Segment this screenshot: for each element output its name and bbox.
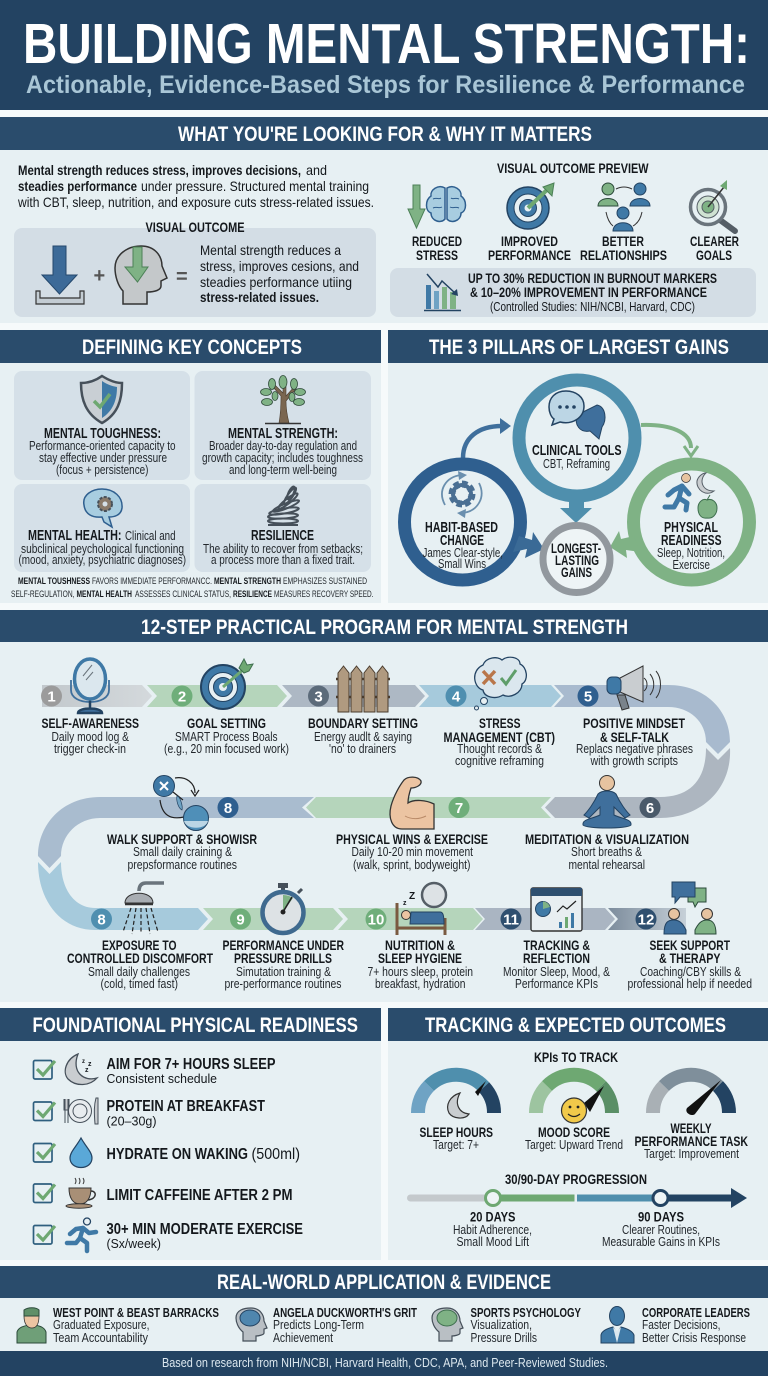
- pillar: physical readiness: Sleep, Notrition,: [657, 545, 725, 560]
- 30/90-day progression: 90 DAYS: [638, 1208, 684, 1224]
- icon: chat and brain: [549, 391, 605, 439]
- step 4: stress management: 4: [452, 688, 461, 706]
- comparison note: EMPHASIZES SUSTAINED: [283, 576, 367, 587]
- 30/90-day progression: [407, 1171, 747, 1249]
- card: mental toughness: Performance-oriented capacity to: [29, 438, 176, 453]
- step 11: tracking: Performance KPIs: [515, 976, 598, 991]
- pillar: clinical tools: CLINICAL TOOLS: [532, 442, 622, 459]
- card: mental toughness: [14, 371, 190, 480]
- step 8: exposure to discomfort: Small daily challenges: [88, 964, 190, 979]
- comparison note: FAVORS IMMEDIATE PERFORMANCC.: [92, 576, 212, 587]
- step 10: nutrition and sleep: NUTRITION &: [385, 937, 455, 953]
- checklist: hydrate: (500ml): [252, 1146, 300, 1163]
- visual outcome preview: [390, 161, 756, 317]
- icon: water drop: [70, 1138, 92, 1168]
- icon: smiley: [562, 1086, 604, 1123]
- step 11: tracking: Monitor Sleep, Mood, &: [503, 964, 610, 979]
- heading: DEFINING KEY CONCEPTS: [82, 336, 302, 359]
- step 1: self-awareness: trigger check-in: [54, 741, 126, 756]
- card: mental strength: Broader day-to-day regulation and: [209, 438, 357, 453]
- panel: foundational physical readiness: [0, 1008, 381, 1260]
- icon: clearer goals: [690, 180, 735, 231]
- step 11: tracking: TRACKING &: [524, 937, 590, 953]
- icon: bed and clock: z: [403, 900, 407, 907]
- checklist: hydrate: [34, 1138, 300, 1168]
- checklist: caffeine: [34, 1178, 292, 1208]
- icon: shield: [81, 376, 122, 423]
- card: mental strength: growth capacity; includes toughness: [202, 450, 363, 465]
- step 12: seek support: & THERAPY: [659, 950, 721, 966]
- arrow: physical to center: [610, 531, 640, 558]
- intro paragraph: with CBT, sleep, nutrition, and exposure cuts stress-related issues.: [17, 194, 374, 210]
- step 6: meditation: [525, 776, 689, 872]
- step 8: exposure to discomfort: CONTROLLED DISCOMFORT: [67, 950, 213, 966]
- pillar: habit-based change: [404, 464, 520, 580]
- step 1: self-awareness: SELF-AWARENESS: [42, 715, 139, 731]
- pillar: physical readiness: PHYSICAL: [664, 519, 718, 536]
- comparison note: RESILIENCE: [233, 589, 272, 600]
- icon: head with blue brain: [236, 1308, 267, 1341]
- icon: business person: [601, 1306, 634, 1343]
- example: grit: [236, 1306, 417, 1345]
- checklist: sleep: AIM FOR 7+ HOURS SLEEP: [106, 1056, 276, 1073]
- icon: spring: [268, 486, 300, 525]
- card: resilience: a process more than a fixed trait.: [211, 552, 355, 567]
- step 3: boundary setting: 3: [314, 688, 323, 706]
- icon: bed and clock: [397, 883, 446, 935]
- icon: moon: z: [88, 1061, 92, 1068]
- arrow: habit to center: [513, 532, 544, 558]
- step 2: goal setting: [164, 659, 289, 756]
- pillar: clinical tools: [519, 380, 635, 496]
- intro paragraph: under pressure. Structured mental training: [141, 178, 369, 194]
- icon: moon: [448, 1093, 469, 1118]
- icon: moon: z: [85, 1067, 89, 1074]
- icon: plate and cutlery: [64, 1098, 98, 1124]
- card: mental health: MENTAL HEALTH:: [28, 528, 122, 544]
- footer: [0, 1351, 768, 1376]
- panel: defining key concepts: [0, 330, 381, 603]
- card: resilience: The ability to recover from setbacks;: [203, 541, 363, 556]
- example: grit: Predicts Long-Term: [273, 1317, 364, 1332]
- checklist: caffeine: LIMIT CAFFEINE AFTER 2 PM: [106, 1187, 292, 1204]
- step 8: exposure to discomfort: (cold, timed fast): [100, 976, 178, 991]
- pillar: physical readiness: READINESS: [661, 532, 722, 549]
- icon: head with green brain: [432, 1308, 463, 1341]
- icon: declining chart: [424, 274, 461, 310]
- step 7: physical wins: PHYSICAL WINS & EXERCISE: [336, 831, 488, 847]
- outcome text: stress-related issues.: [200, 289, 319, 305]
- checklist: exercise: (Sx/week): [106, 1236, 161, 1251]
- icon: megaphone: [607, 666, 660, 710]
- step 10: nutrition and sleep: SLEEP HYGIENE: [378, 950, 462, 966]
- arrow: habit to clinical: [463, 418, 511, 458]
- center: longest-lasting gains: GAINS: [561, 564, 592, 580]
- step 4: stress management: [444, 657, 555, 768]
- step 11: tracking: 11: [503, 912, 519, 928]
- card: mental strength: [194, 371, 371, 480]
- arrow: clinical to center: [560, 500, 592, 523]
- example: west point: [17, 1306, 219, 1345]
- icon: brain with gear: [84, 489, 122, 527]
- step 5: positive mindset: & SELF-TALK: [600, 729, 669, 745]
- icon: down arrow into tray: [36, 246, 84, 304]
- step 8: exposure to discomfort: [67, 883, 213, 991]
- checklist: exercise: [34, 1218, 303, 1251]
- step 2: goal setting: GOAL SETTING: [187, 715, 266, 731]
- visual outcome preview: PERFORMANCE: [488, 248, 571, 263]
- 30/90-day progression: 20 DAYS: [470, 1208, 516, 1224]
- panel: what you're looking for: [0, 117, 768, 323]
- visual outcome preview: CLEARER: [690, 234, 739, 249]
- step 9: performance drills: PRESSURE DRILLS: [234, 950, 332, 966]
- heading: WHAT YOU'RE LOOKING FOR & WHY IT MATTERS: [178, 123, 592, 146]
- step 5: positive mindset: with growth scripts: [590, 753, 678, 768]
- 30/90-day progression: 30/90-DAY PROGRESSION: [505, 1171, 647, 1187]
- gauge: sleep hours: [418, 1075, 494, 1152]
- heading: 12-STEP PRACTICAL PROGRAM FOR MENTAL STRENGTH: [141, 616, 628, 639]
- icon: gear with cycle: [442, 471, 482, 518]
- pillar: clinical tools: CBT, Reframing: [543, 456, 610, 471]
- card: mental strength: MENTAL STRENGTH:: [228, 426, 338, 442]
- icon: reduced stress: [408, 185, 466, 228]
- timeline arrow: [407, 1188, 747, 1208]
- icon: shower: [123, 883, 164, 934]
- comparison note: MENTAL TOUSHNESS: [18, 576, 90, 587]
- card: mental health: (mood, anxiety, psychiatric diagnoses): [18, 552, 186, 567]
- step 3: boundary setting: [308, 666, 418, 756]
- step 7: physical wins: (walk, sprint, bodyweight): [353, 857, 470, 872]
- visual outcome preview: STRESS: [416, 248, 458, 263]
- outcome text: steadies performance utiing: [200, 274, 352, 290]
- intro paragraph: [17, 162, 374, 210]
- example: grit: Achievement: [273, 1330, 333, 1345]
- step 6: meditation: mental rehearsal: [568, 857, 645, 872]
- step 8: walk support: 8: [224, 800, 232, 817]
- step 9: performance drills: 9: [236, 912, 245, 928]
- visual outcome preview: RELATIONSHIPS: [580, 248, 667, 263]
- checklist: sleep: [34, 1054, 276, 1086]
- example: sports psychology: Pressure Drills: [470, 1330, 537, 1345]
- icon: stopwatch: [262, 883, 304, 933]
- equals: =: [176, 266, 188, 288]
- icon: runner, moon, apple: [665, 473, 717, 518]
- outcome text: [200, 242, 359, 305]
- pillar: physical readiness: Exercise: [672, 557, 710, 572]
- intro paragraph: and: [306, 162, 327, 178]
- icon: better relationships: [598, 183, 650, 231]
- icon: moon: [65, 1054, 97, 1085]
- step 7: physical wins: Daily 10-20 min movement: [352, 844, 473, 859]
- icon: tree: [260, 376, 306, 424]
- step 3: boundary setting: Energy audlt & saying: [314, 729, 412, 744]
- 30/90-day progression: Measurable Gains in KPIs: [602, 1234, 720, 1249]
- card: resilience: [194, 484, 371, 572]
- step 3: boundary setting: BOUNDARY SETTING: [308, 715, 418, 731]
- 30/90-day progression: Small Mood Lift: [456, 1234, 529, 1249]
- pillar: habit-based change: CHANGE: [440, 532, 484, 549]
- step 12: seek support: SEEK SUPPORT: [650, 937, 730, 953]
- example: west point: Team Accountability: [53, 1330, 148, 1345]
- center: longest-lasting gains: LASTING: [555, 552, 599, 568]
- icon: dashboard: [531, 888, 582, 931]
- center: longest-lasting gains: LONGEST-: [551, 540, 601, 556]
- step 7: physical wins: 7: [455, 800, 463, 817]
- card: mental health: subclinical peychological functioning: [21, 541, 184, 556]
- step 5: positive mindset: Replacs negative phrases: [576, 741, 693, 756]
- gauge: weekly performance: WEEKLY: [670, 1120, 712, 1136]
- step 2: goal setting: (e.g., 20 min focused work): [164, 741, 289, 756]
- panel: three pillars: [388, 330, 768, 603]
- pillar: habit-based change: HABIT-BASED: [425, 519, 498, 536]
- step 9: performance drills: [222, 883, 344, 991]
- example: grit: ANGELA DUCKWORTH'S GRIT: [273, 1306, 417, 1320]
- step 1: self-awareness: 1: [47, 688, 56, 706]
- checklist: protein: (20–30g): [106, 1114, 156, 1128]
- visual outcome preview: IMPROVED: [501, 234, 558, 249]
- step 2: goal setting: 2: [178, 688, 186, 706]
- step 9: performance drills: Simutation training &: [236, 964, 331, 979]
- icon: mirror: [71, 659, 109, 713]
- step 8: exposure to discomfort: EXPOSURE TO: [102, 937, 177, 953]
- card: resilience: RESILIENCE: [251, 528, 314, 544]
- visual outcome preview: BETTER: [602, 234, 644, 249]
- icon: bed and clock: Z: [409, 891, 415, 902]
- KPI heading: KPIs TO TRACK: [534, 1049, 618, 1065]
- step 8: walk support: prepsformance routines: [128, 857, 237, 872]
- footer: Based on research from NIH/NCBI, Harvard Health, CDC, APA, and Peer-Reviewed Studies.: [162, 1355, 608, 1370]
- checklist: protein: [34, 1098, 265, 1128]
- checklist: sleep: Consistent schedule: [106, 1071, 217, 1086]
- checklist: exercise: 30+ MIN MODERATE EXERCISE: [106, 1221, 303, 1238]
- stat callout: (Controlled Studies: NIH/NCBI, Harvard, CDC): [490, 300, 695, 314]
- step 4: stress management: Thought records &: [457, 741, 542, 756]
- stat callout: & 10–20% IMPROVEMENT IN PERFORMANCE: [470, 285, 707, 300]
- step 1: self-awareness: [41, 659, 139, 756]
- step 10: nutrition and sleep: [366, 883, 473, 991]
- comparison note: MENTAL STRENGTH: [214, 576, 281, 587]
- example: west point: Graduated Exposure,: [53, 1317, 150, 1332]
- gauge: sleep hours: SLEEP HOURS: [420, 1124, 493, 1140]
- comparison note: [11, 576, 374, 600]
- step 6: meditation: Short breaths &: [571, 844, 642, 859]
- step 10: nutrition and sleep: breakfast, hydration: [375, 976, 466, 991]
- gauge: weekly performance: [634, 1075, 748, 1161]
- heading: REAL-WORLD APPLICATION & EVIDENCE: [217, 1271, 551, 1294]
- icon: thought cloud: [474, 657, 526, 710]
- step 10: nutrition and sleep: 7+ hours sleep, protein: [368, 964, 473, 979]
- example: corporate leaders: Faster Decisions,: [642, 1317, 720, 1332]
- step 8: walk support: [107, 776, 257, 872]
- example: sports psychology: [432, 1306, 582, 1345]
- icon: people talking: [664, 882, 716, 934]
- 30/90-day progression: Clearer Routines,: [622, 1222, 700, 1237]
- heading: FOUNDATIONAL PHYSICAL READINESS: [32, 1014, 358, 1037]
- step 5: positive mindset: POSITIVE MINDSET: [583, 715, 685, 731]
- plus: +: [94, 265, 105, 287]
- icon: soldier: [17, 1308, 46, 1343]
- icon: flexed arm: [390, 777, 434, 829]
- step 11: tracking: [500, 888, 610, 991]
- card: mental strength: and long-term well-being: [229, 462, 337, 477]
- comparison note: SELF-REGULATION,: [11, 589, 74, 600]
- center: longest-lasting gains: [543, 526, 610, 592]
- step 2: goal setting: SMART Process Boals: [175, 729, 278, 744]
- step 4: stress management: cognitive reframing: [455, 753, 544, 768]
- pillar: habit-based change: Small Wins: [438, 556, 486, 571]
- step 3: boundary setting: 'no' to drainers: [329, 741, 396, 756]
- step 4: stress management: STRESS: [479, 715, 520, 731]
- step 5: positive mindset: [576, 666, 693, 768]
- checklist: hydrate: HYDRATE ON WAKING: [106, 1146, 248, 1163]
- icon: coffee cup: [66, 1178, 95, 1208]
- icon: cycle with water ball: [154, 776, 208, 830]
- outcome text: stress, improves cesions, and: [200, 258, 359, 274]
- intro paragraph: Mental strength reduces stress, improves decisions,: [18, 162, 301, 178]
- step 12: seek support: 12: [638, 912, 654, 928]
- example: sports psychology: Visualization,: [470, 1317, 532, 1332]
- visual outcome box: VISUAL OUTCOME: [146, 220, 244, 235]
- step 8: walk support: WALK SUPPORT & SHOWISR: [107, 831, 257, 847]
- step 7: physical wins: [336, 777, 488, 872]
- panel: real-world application: [0, 1266, 768, 1351]
- stat callout: [390, 268, 756, 317]
- step 8: exposure to discomfort: 8: [97, 912, 106, 928]
- step 10: nutrition and sleep: 10: [368, 912, 384, 928]
- icon: runner: [67, 1218, 96, 1251]
- card: mental health: Clinical and: [125, 528, 176, 543]
- step 4: stress management: MANAGEMENT (CBT): [444, 729, 555, 745]
- pillar: habit-based change: James Clear-style,: [422, 545, 503, 560]
- arrow: clinical to physical: [641, 425, 698, 456]
- panel: 12-step program: [0, 610, 768, 1002]
- card: mental toughness: MENTAL TOUGHNESS:: [44, 426, 161, 442]
- comparison note: ASSESSES CLINICAL STATUS,: [135, 589, 231, 600]
- step 9: performance drills: pre-performance routines: [224, 976, 342, 991]
- card: mental toughness: (focus + persistence): [56, 462, 148, 477]
- step 12: seek support: [628, 882, 752, 991]
- icon: fence: [336, 666, 390, 712]
- comparison note: MENTAL HEALTH: [76, 589, 132, 600]
- pillar: physical readiness: [634, 464, 750, 580]
- step 12: seek support: Coaching/CBY skills &: [640, 964, 741, 979]
- visual outcome preview: REDUCED: [412, 234, 462, 249]
- checklist: protein: PROTEIN AT BREAKFAST: [106, 1098, 265, 1115]
- gauge: mood score: MOOD SCORE: [538, 1124, 610, 1140]
- icon: improved performance: [507, 183, 554, 229]
- icon: meditating figure: [583, 776, 631, 828]
- visual outcome box: [14, 220, 376, 317]
- step 8: walk support: Small daily craining &: [133, 844, 232, 859]
- step 6: meditation: MEDITATION & VISUALIZATION: [525, 831, 689, 847]
- icon: head with arrow: [115, 246, 167, 304]
- 30/90-day progression: Habit Adherence,: [453, 1222, 532, 1237]
- step 9: performance drills: PERFORMANCE UNDER: [222, 937, 344, 953]
- card: mental toughness: stay effective under pressure: [39, 450, 167, 465]
- step 1: self-awareness: Daily mood log &: [52, 729, 129, 744]
- step 6: meditation: 6: [646, 800, 654, 817]
- step 11: tracking: REFLECTION: [523, 950, 590, 966]
- step 5: positive mindset: 5: [584, 688, 592, 706]
- visual outcome preview: VISUAL OUTCOME PREVIEW: [497, 161, 649, 176]
- example: sports psychology: SPORTS PSYCHOLOGY: [470, 1306, 582, 1320]
- visual outcome preview: GOALS: [696, 248, 732, 263]
- intro paragraph: steadies performance: [18, 178, 137, 194]
- panel: tracking and expected outcomes: [388, 1008, 768, 1260]
- gauge: mood score: [525, 1075, 623, 1152]
- example: west point: WEST POINT & BEAST BARRACKS: [53, 1306, 219, 1320]
- gauge: sleep hours: Target: 7+: [433, 1137, 479, 1152]
- card: mental health: [14, 484, 190, 572]
- example: corporate leaders: [601, 1306, 750, 1345]
- title banner: [0, 0, 768, 110]
- gauge: mood score: Target: Upward Trend: [525, 1137, 623, 1152]
- icon: moon: z: [82, 1059, 85, 1065]
- comparison note: MEASURES RECOVERY SPEED.: [274, 589, 374, 600]
- outcome text: Mental strength reduces a: [200, 242, 341, 258]
- gauge: weekly performance: Target: Improvement: [644, 1146, 739, 1161]
- icon: target: [201, 659, 253, 709]
- ribbon path: [38, 685, 730, 930]
